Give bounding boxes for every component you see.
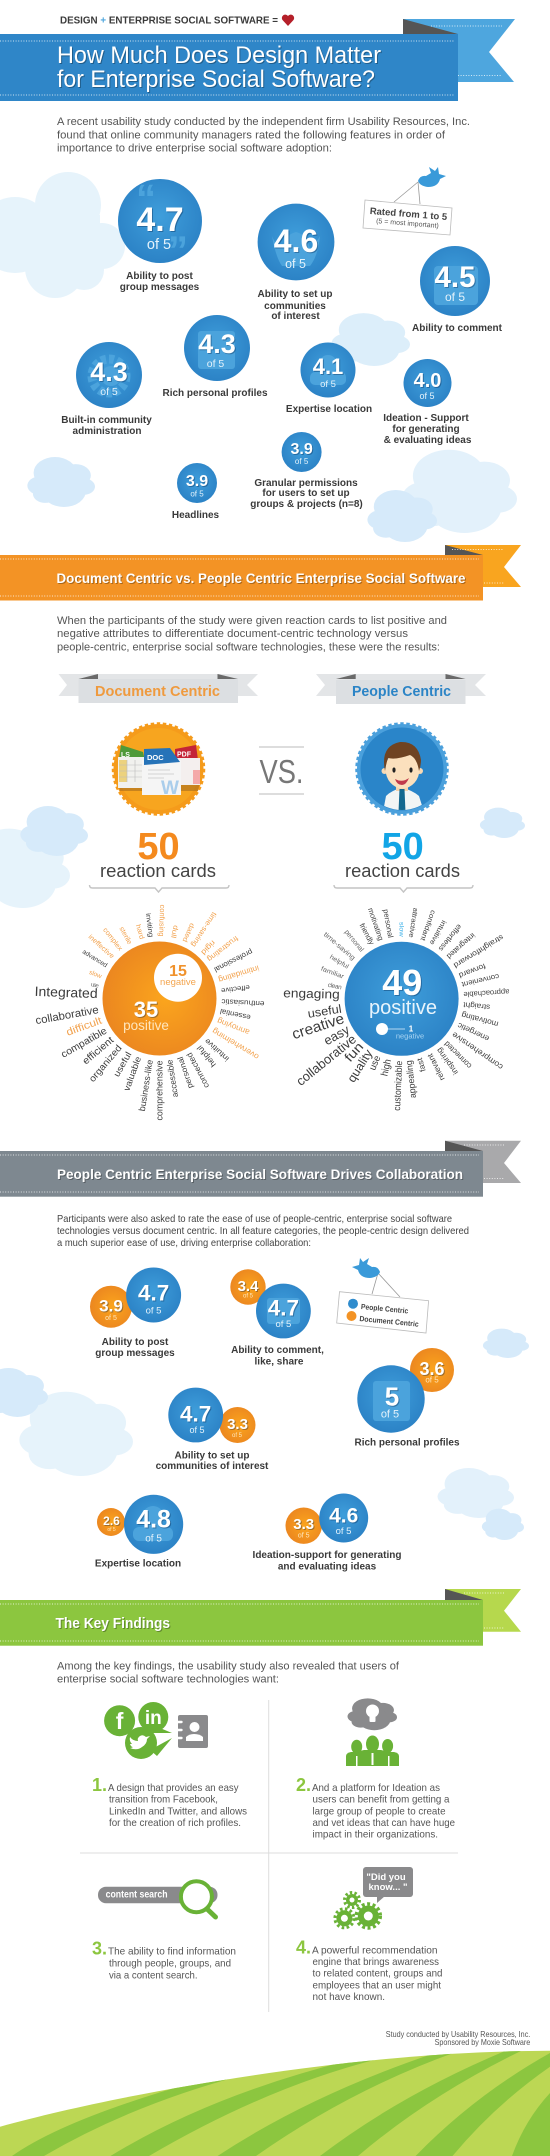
icon: document badge: PDF (177, 752, 192, 758)
word labels: document centric: connected (185, 1051, 211, 1090)
word labels: document centric: inviting (144, 913, 154, 938)
feature rating: built-in community administration: Built-in community (61, 415, 152, 426)
feature rating: granular permissions: for users to set up (262, 488, 350, 499)
comparison: comment like share: of 5 (243, 1294, 254, 1300)
title banner: for Enterprise Social Software? (57, 66, 375, 93)
paragraph: ease of use (57, 1214, 469, 1249)
comparison: expertise location: 2.6 (103, 1514, 120, 1528)
feature rating: ideation: of 5 (419, 391, 435, 401)
word labels: document centric: business-like (137, 1059, 155, 1112)
comparison: expertise location (95, 1495, 183, 1570)
word labels: document centric: organized (87, 1043, 124, 1085)
chart: document centric word sun: 15 (169, 963, 187, 980)
word labels: document centric (34, 904, 265, 1120)
feature rating: granular permissions (250, 432, 363, 510)
comparison: communities of interest: of 5 (232, 1433, 243, 1439)
word labels: people centric: useful (307, 1002, 342, 1021)
paragraph: key findings (57, 1660, 400, 1686)
word labels: people centric: inspiring (435, 1046, 460, 1077)
comparison: comment like share: Ability to comment, (231, 1345, 324, 1356)
word labels: document centric: dated (181, 922, 195, 943)
icon: content search: content search (106, 1889, 168, 1901)
comparison: post group messages (90, 1268, 181, 1359)
icon: document badge: LS (121, 752, 130, 759)
finding 4: 4. (296, 1937, 311, 1957)
word labels: document centric: intimidating (217, 964, 260, 984)
word labels: people centric: personal (381, 908, 395, 939)
chart: people centric word sun: 1 (409, 1024, 414, 1034)
word labels: document centric: useful (111, 1050, 133, 1078)
comparison: rich personal profiles: Rich personal profiles (354, 1438, 460, 1449)
feature rating: ability to comment (412, 246, 503, 334)
word labels: people centric: fast (415, 1056, 428, 1073)
feature rating: granular permissions: groups & projects (n=8) (250, 499, 363, 510)
finding 2 (296, 1775, 455, 1841)
finding 4: employees that an user might (312, 1980, 441, 1991)
chart: people centric word sun: positive (369, 997, 437, 1019)
feature rating: communities of interest: of 5 (285, 257, 306, 271)
word labels: people centric: fun (341, 1039, 366, 1065)
word labels: document centric: effective (220, 983, 250, 993)
word labels: people centric: easy (321, 1022, 352, 1048)
stat: people 50 reaction cards: 50 (382, 826, 424, 868)
word labels: people centric: intuitive (428, 919, 447, 946)
comparison: ideation (253, 1494, 401, 1572)
word labels: document centric: intuitive (203, 1037, 231, 1063)
comparison: communities of interest: 4.7 (180, 1402, 211, 1427)
finding 4: not have known. (312, 1992, 385, 2003)
comparison: expertise location: of 5 (145, 1534, 162, 1545)
word labels: document centric: personal (176, 1055, 195, 1090)
finding 3: 3. (92, 1939, 107, 1959)
credits: Sponsored by Moxie Software (435, 2037, 531, 2047)
comparison: rich personal profiles (354, 1348, 460, 1449)
word labels: document centric: enthusiastic (221, 997, 265, 1008)
feature rating: granular permissions: Granular permissions (254, 478, 358, 489)
chart: document centric word sun: positive (123, 1018, 169, 1033)
chart: people centric word sun: 49 (382, 962, 422, 1003)
paragraph: ease of use: a much superior ease of use, driving enterprise collaboration: (57, 1238, 311, 1249)
word labels: document centric: comprehensive (155, 1060, 165, 1120)
finding 2: 2. (296, 1775, 311, 1795)
finding 1: for the creation of rich profiles. (109, 1818, 241, 1829)
word labels: people centric (283, 907, 510, 1111)
word labels: people centric: integrated (445, 931, 477, 961)
feature rating: expertise location: Expertise location (286, 404, 372, 415)
legend note: Document Centric (359, 1314, 419, 1329)
feature rating: built-in community administration (61, 342, 152, 437)
section banner: document vs people (0, 545, 521, 600)
paragraph: ease of use: technologies versus document centric. In all feature categories, the people-centric design delivered (57, 1226, 469, 1237)
section banner: key findings: The Key Findings (56, 1616, 170, 1632)
finding 2: users can benefit from getting a (312, 1795, 450, 1806)
stat: document 50 reaction cards: reaction cards (100, 861, 216, 881)
word labels: people centric: convenient (460, 972, 500, 989)
word labels: people centric: confidant (419, 909, 436, 941)
intro text: importance to drive enterprise social software adoption: (57, 142, 332, 154)
word labels: people centric: motivating (366, 907, 386, 942)
finding 3 (92, 1939, 236, 1981)
paragraph: key findings: enterprise social software technologies want: (57, 1674, 279, 1686)
stat: people 50 reaction cards: reaction cards (345, 861, 460, 881)
word labels: document centric: collaborative (35, 1004, 100, 1027)
word labels: people centric: relevant (425, 1051, 447, 1082)
ribbon: document centric (58, 674, 258, 703)
comparison: comment like share: 4.7 (268, 1296, 299, 1321)
icon: person badge (357, 724, 447, 814)
chart: people centric word sun (283, 907, 510, 1111)
word labels: people centric: effortless (437, 922, 464, 953)
comparison: ideation: 4.6 (329, 1505, 358, 1528)
legend note (337, 1258, 429, 1333)
feature rating: expertise location: of 5 (320, 379, 336, 390)
chart: document centric word sun: 35 (134, 997, 158, 1022)
comparison: communities of interest: of 5 (189, 1425, 205, 1435)
feature rating: post group messages: ” (168, 229, 188, 273)
section banner: key findings (0, 1589, 521, 1646)
ribbon: document centric: Document Centric (95, 684, 220, 700)
comparison: communities of interest: 3.3 (227, 1416, 248, 1433)
background clouds (0, 172, 529, 1540)
paragraph: ease of use: Participants were also asked to rate the ease of use of people-centric, enterprise social software (57, 1214, 452, 1225)
finding 4: A powerful recommendation (312, 1945, 438, 1956)
word labels: people centric: creative (290, 1010, 346, 1043)
feature rating: communities of interest (258, 204, 334, 322)
comparison: post group messages: 4.7 (138, 1281, 169, 1306)
word labels: document centric: time-saving (189, 910, 219, 949)
comparison: ideation: and evaluating ideas (278, 1561, 377, 1572)
finding 2: impact in their organizations. (312, 1830, 438, 1841)
icon: social bubbles and contact book (104, 1702, 208, 1759)
word labels: document centric: efficient (81, 1035, 116, 1067)
word labels: people centric: quality (344, 1047, 375, 1085)
striped green field (0, 2040, 550, 2156)
feature rating: built-in community administration: 4.3 (90, 357, 128, 387)
VS. divider (259, 747, 304, 794)
word labels: people centric: appealing (404, 1060, 418, 1099)
finding 4: engine that brings awareness (312, 1957, 439, 1968)
feature rating: post group messages: 4.7 (136, 201, 184, 239)
word labels: people centric: straightforward (452, 933, 505, 970)
word labels: people centric: customizable (392, 1061, 405, 1111)
icon: document badge (114, 724, 204, 814)
paragraph: reaction cards: people-centric, enterprise social software technologies, these were the results: (57, 642, 440, 654)
feature rating: communities of interest: of interest (271, 311, 320, 322)
comparison: expertise location: 4.8 (136, 1506, 171, 1534)
stat: document 50 reaction cards: 50 (137, 826, 180, 868)
feature rating: ability to comment: 4.5 (434, 261, 476, 294)
finding 1: transition from Facebook, (109, 1795, 218, 1806)
comparison: expertise location: of 5 (107, 1527, 116, 1533)
word labels: document centric: professional (212, 947, 254, 974)
feature rating: post group messages: “ (136, 177, 156, 221)
feature rating: communities of interest: Ability to set up (258, 289, 332, 300)
word labels: people centric: straight (462, 1000, 491, 1012)
word labels: document centric: Integrated (34, 984, 98, 1001)
word labels: document centric: valuable (121, 1055, 143, 1092)
comparison: ideation: of 5 (336, 1526, 351, 1537)
icon: content search (98, 1881, 218, 1917)
comparison: post group messages: of 5 (105, 1315, 117, 1322)
word labels: people centric: time-saving (322, 931, 356, 962)
word labels: document centric: difficult (65, 1015, 104, 1039)
intro text: found that online community managers rated the following features in order of (57, 130, 446, 142)
word labels: people centric: familiar (320, 965, 346, 981)
icon: ideation cloud and team (346, 1698, 399, 1766)
word labels: document centric: frustrating (206, 934, 240, 964)
finding 3: via a content search. (109, 1970, 198, 1981)
word labels: document centric: hard (134, 924, 145, 940)
word labels: people centric: motivating (460, 1010, 499, 1029)
feature rating: communities of interest: 4.6 (274, 223, 318, 259)
feature rating: expertise location (286, 342, 372, 415)
feature rating: built-in community administration: of 5 (100, 386, 118, 398)
comparison: post group messages: Ability to post (102, 1337, 169, 1348)
word labels: document centric: slow (88, 969, 103, 980)
word labels: document centric: essential (219, 1007, 251, 1022)
word labels: people centric: connected (442, 1039, 474, 1070)
comparison: communities of interest: communities of interest (156, 1461, 269, 1472)
word labels: document centric: complex (101, 927, 124, 953)
word labels: document centric: ineffective (87, 934, 115, 960)
feature rating: post group messages: Ability to post (126, 271, 193, 282)
word labels: people centric: collaborative (293, 1031, 359, 1089)
finding 4: to related content, groups and (312, 1969, 443, 1980)
word labels: people centric: use (367, 1054, 384, 1072)
legend note: People Centric (361, 1302, 409, 1316)
feature rating: headlines: 3.9 (186, 473, 208, 490)
word labels: document centric: dull (169, 924, 179, 939)
section banner: collaboration: People Centric Enterprise Social Software Drives Collaboration (57, 1167, 463, 1182)
word labels: document centric: rigid (199, 938, 218, 957)
word labels: document centric: accessible (164, 1059, 180, 1098)
feature rating: ideation: & evaluating ideas (384, 435, 472, 446)
finding 1: LinkedIn and Twitter, and allows (109, 1806, 247, 1817)
feature rating: ideation: 4.0 (414, 370, 441, 392)
feature rating: rich personal profiles (162, 315, 268, 399)
word labels: people centric: approachable (463, 987, 510, 999)
feature rating: ideation: for generating (392, 424, 460, 435)
icon: did you know gears: "Did you (366, 1872, 406, 1883)
paragraph: key findings: Among the key findings, the usability study also revealed that users of (57, 1660, 400, 1672)
chart: document centric word sun: negative (160, 977, 196, 988)
feature rating: rich personal profiles: 4.3 (198, 329, 236, 359)
title banner: How Much Does Design Matter (57, 42, 381, 69)
stat: people 50 reaction cards (334, 826, 473, 892)
feature rating: expertise location: 4.1 (313, 354, 343, 379)
comparison: post group messages: 3.9 (99, 1297, 123, 1316)
word labels: document centric: advanced (81, 948, 109, 969)
word labels: document centric: sterile (118, 926, 133, 946)
feature rating: ability to comment: Ability to comment (412, 323, 503, 334)
icon: document badge: DOC (147, 753, 164, 762)
word labels: people centric: comprehensive (450, 1030, 505, 1072)
paragraph: reaction cards: negative attributes to differentiate document-centric technology versus (57, 628, 409, 640)
word labels: document centric: compatible (59, 1025, 109, 1061)
feature rating: granular permissions: 3.9 (290, 441, 313, 458)
icon: social bubbles and contact book: in (145, 1708, 162, 1729)
word labels: people centric: clean (327, 982, 343, 991)
feature rating: ability to comment: of 5 (445, 290, 465, 304)
feature rating: post group messages: of 5 (147, 237, 171, 253)
comparison: expertise location: Expertise location (95, 1559, 181, 1570)
comparison: rich personal profiles: 3.6 (419, 1359, 445, 1379)
feature rating: headlines: Headlines (172, 510, 220, 521)
word labels: people centric: energetic (456, 1021, 491, 1043)
comparison: ideation: Ideation-support for generating (253, 1550, 401, 1561)
word labels: document centric: confusing (157, 904, 167, 937)
icon: did you know gears: know... " (368, 1882, 408, 1893)
feature rating: ideation (383, 359, 472, 446)
word labels: document centric: use (90, 982, 100, 990)
icon: document badge: W (161, 778, 179, 799)
VS. divider: VS. (260, 753, 304, 790)
icon: did you know gears (335, 1867, 413, 1928)
feature rating: ideation: Ideation - Support (383, 413, 469, 424)
comparison: comment like share: like, share (255, 1357, 304, 1368)
word labels: people centric: helpful (328, 954, 350, 971)
note: rated from 1 to 5 (363, 167, 452, 235)
word labels: people centric: forward (458, 962, 487, 980)
feature rating: granular permissions: of 5 (295, 457, 309, 466)
feature rating: post group messages (118, 177, 202, 293)
finding 1: A design that provides an easy (108, 1783, 239, 1794)
feature rating: built-in community administration: administration (73, 426, 141, 437)
word labels: people centric: friendly (358, 922, 376, 946)
finding 3: The ability to find information (108, 1947, 236, 1958)
finding 1 (92, 1775, 247, 1829)
word labels: people centric: attractive (407, 907, 419, 938)
finding 2: And a platform for Ideation as (312, 1783, 440, 1794)
tagline: DESIGN + ENTERPRISE SOCIAL SOFTWARE = (60, 14, 278, 26)
icon: social bubbles and contact book: f (116, 1708, 124, 1734)
word labels: document centric: overwhelming (210, 1026, 261, 1061)
finding 1: 1. (92, 1775, 107, 1795)
note: rated from 1 to 5: Rated from 1 to 5 (369, 206, 448, 223)
word labels: document centric: helpful (195, 1043, 218, 1069)
paragraph: reaction cards: When the participants of the study were given reaction cards to list positive and (57, 615, 447, 627)
feature rating: communities of interest: communities (264, 301, 326, 312)
word labels: document centric: annoying (216, 1016, 251, 1037)
finding 4 (296, 1937, 443, 2003)
comparison: rich personal profiles: of 5 (425, 1376, 439, 1385)
paragraph: reaction cards (57, 615, 447, 654)
chart: document centric word sun (34, 904, 265, 1120)
comparison: rich personal profiles: 5 (385, 1382, 399, 1412)
finding 3: through people, groups, and (109, 1959, 231, 1970)
finding 2: and vet ideas that can have huge (312, 1818, 455, 1829)
stat: document 50 reaction cards (90, 826, 229, 892)
feature rating: rich personal profiles: Rich personal profiles (162, 388, 268, 399)
finding 2: large group of people to create (312, 1806, 446, 1817)
title banner (0, 19, 515, 101)
intro text: A recent usability study conducted by the independent firm Usability Resources, Inc. (57, 116, 470, 128)
comparison: comment like share (230, 1269, 324, 1368)
comparison: comment like share: 3.4 (238, 1278, 259, 1295)
feature rating: headlines: of 5 (190, 490, 204, 498)
ribbon: people centric (316, 674, 486, 704)
section banner: collaboration (0, 1141, 521, 1197)
note: rated from 1 to 5: (5 = most important) (376, 218, 439, 230)
feature rating: post group messages: group messages (120, 282, 200, 293)
comparison: communities of interest: Ability to set up (174, 1450, 250, 1461)
comparison: post group messages: of 5 (146, 1306, 161, 1316)
feature rating: rich personal profiles: of 5 (207, 358, 224, 370)
comparison: communities of interest (156, 1388, 269, 1472)
credits (386, 2029, 531, 2047)
section banner: document vs people: Document Centric vs. People Centric Enterprise Social Software (56, 571, 466, 586)
comparison: ideation: 3.3 (293, 1516, 314, 1533)
word labels: people centric: slow (397, 922, 404, 937)
ribbon: people centric: People Centric (352, 684, 451, 700)
chart: people centric word sun: negative (396, 1032, 424, 1041)
feature rating: headlines (172, 463, 220, 521)
word labels: people centric: engaging (283, 985, 340, 1002)
comparison: ideation: of 5 (298, 1533, 310, 1540)
intro text (57, 116, 470, 154)
comparison: post group messages: group messages (95, 1348, 175, 1359)
word labels: people centric: high (379, 1058, 394, 1077)
comparison: rich personal profiles: of 5 (381, 1409, 399, 1421)
word labels: people centric: personal (343, 929, 365, 954)
comparison: comment like share: of 5 (275, 1319, 291, 1330)
